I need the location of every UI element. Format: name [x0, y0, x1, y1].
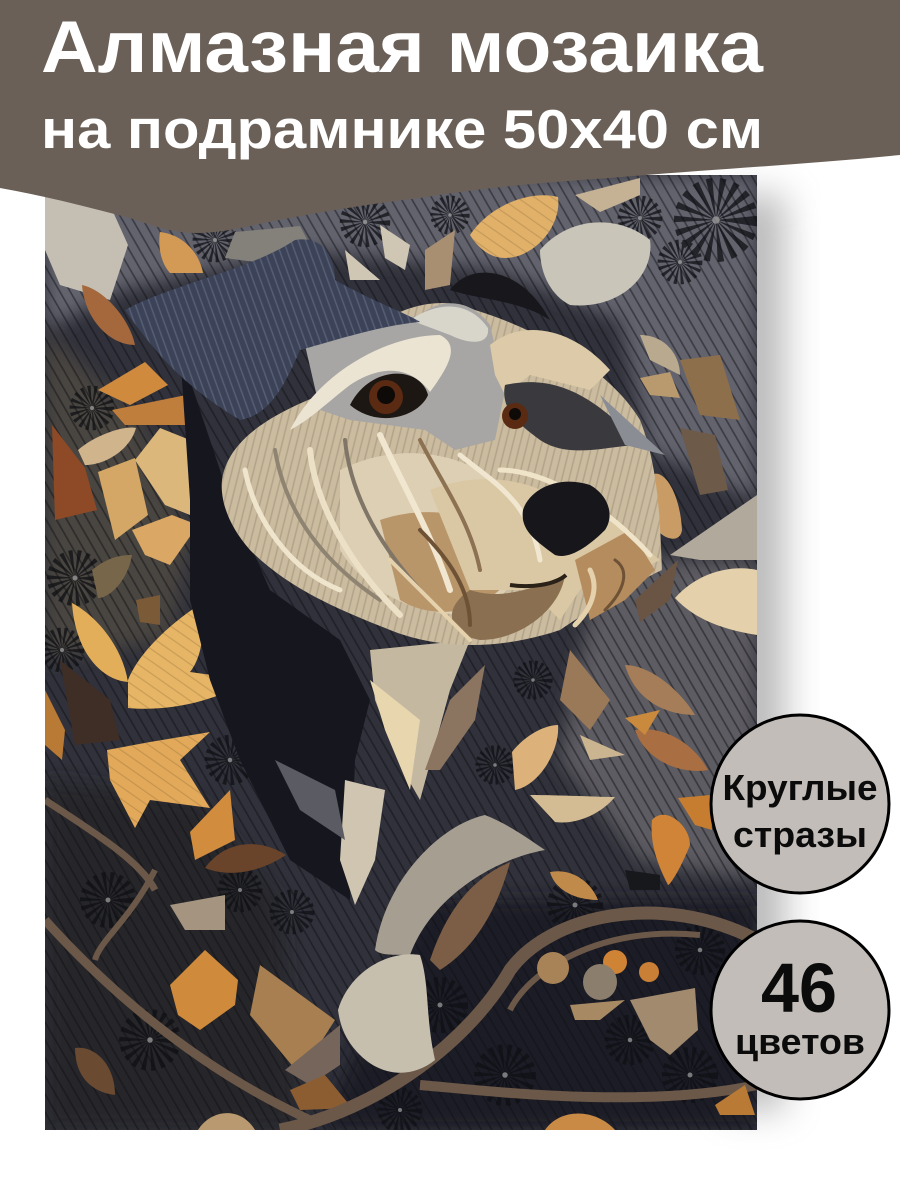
bottom-right small leaves — [537, 950, 755, 1115]
left eye — [350, 374, 428, 418]
right eye iris — [502, 403, 528, 429]
dog: neck and chest — [180, 350, 485, 905]
plume leaf and bottom white leaf — [338, 815, 545, 1073]
badge: round rhinestones — [711, 715, 889, 893]
right leaves — [512, 474, 757, 900]
painting: dog among autumn leaves — [45, 175, 757, 1130]
dark star flowers — [51, 199, 737, 1121]
skull fur — [305, 303, 505, 450]
bottom-left leaves and branches — [45, 800, 757, 1130]
badge: 46 colours: 46 — [761, 949, 837, 1027]
dog: dark ear — [125, 239, 550, 420]
top leaves — [45, 178, 740, 495]
left eyebrow — [290, 335, 451, 430]
dog: head — [222, 303, 665, 645]
badge: round rhinestones: стразы — [733, 814, 867, 855]
title: Алмазная мозаика — [41, 7, 765, 88]
mouth line — [510, 575, 566, 586]
painting background — [45, 175, 757, 1130]
left eye iris — [369, 380, 403, 414]
badge: 46 colours: цветов — [735, 1021, 865, 1062]
nose — [523, 482, 610, 556]
canvas shadow — [725, 195, 785, 1110]
left leaves — [45, 285, 286, 873]
right eye patch — [504, 382, 640, 450]
cheek pale fur — [340, 453, 506, 614]
header band — [0, 0, 900, 233]
fur streaks — [245, 435, 650, 640]
subtitle: на подрамнике 50х40 см — [41, 98, 763, 160]
badge: round rhinestones: Круглые — [722, 767, 878, 808]
badge: 46 colours — [711, 921, 889, 1099]
right eyebrow — [490, 330, 610, 395]
